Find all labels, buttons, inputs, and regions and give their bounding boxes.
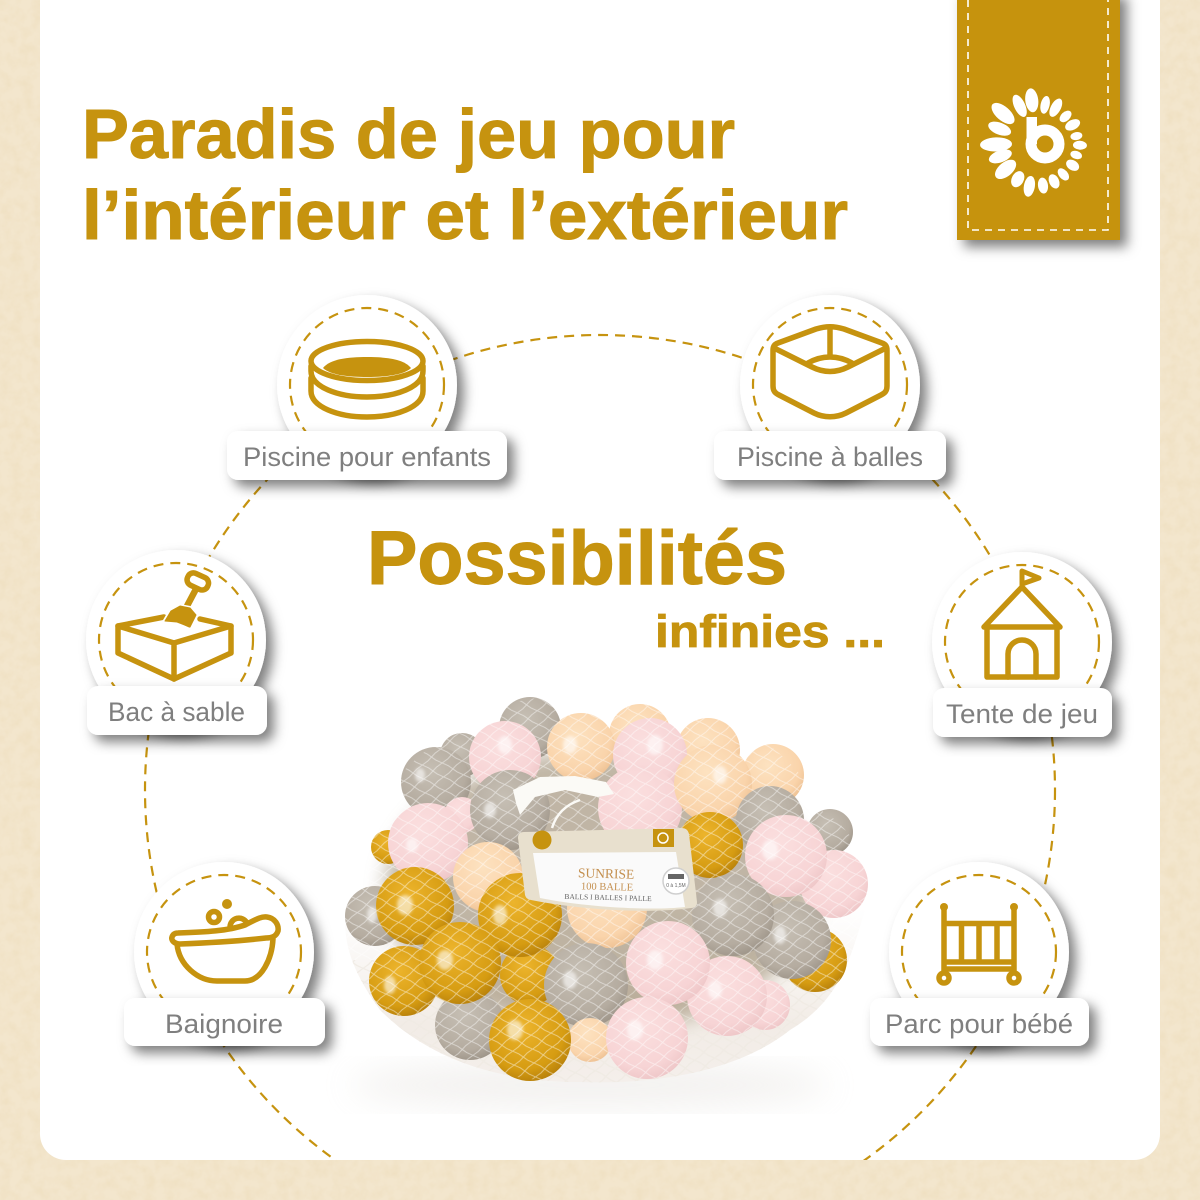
use: bac à sable bbox=[86, 550, 267, 735]
icon: brand sunflower logo bbox=[980, 88, 1087, 198]
label: piscine à balles bbox=[714, 431, 946, 480]
product label tag: SUNRISE bbox=[578, 865, 634, 882]
product label tag bbox=[518, 828, 697, 911]
product photo: bag of balls in net bbox=[340, 695, 875, 1109]
label: piscine à balles: Piscine à balles bbox=[737, 442, 923, 472]
label: parc pour bébé: Parc pour bébé bbox=[885, 1009, 1073, 1039]
label: bac à sable bbox=[87, 686, 267, 735]
icon: baby cot bbox=[939, 903, 1019, 983]
brand tag bbox=[957, 0, 1120, 240]
use: baignoire bbox=[124, 862, 325, 1046]
use: parc pour bébé bbox=[870, 862, 1089, 1046]
heading: possibilités infinies bbox=[367, 516, 885, 657]
product label tag: BALLS I BALLES I PALLE bbox=[564, 892, 652, 903]
icon: sandbox with shovel bbox=[118, 571, 231, 679]
use: piscine à balles bbox=[714, 295, 946, 480]
label: baignoire: Baignoire bbox=[165, 1009, 283, 1039]
label: tente de jeu bbox=[933, 688, 1112, 737]
net bbox=[340, 695, 875, 1087]
dashed ring connecting the uses bbox=[145, 335, 1055, 1200]
product label tag: 0 à 1,5M bbox=[666, 883, 686, 889]
label: parc pour bébé bbox=[870, 998, 1089, 1046]
icon: ball pit box bbox=[773, 327, 887, 417]
label: piscine pour enfants bbox=[227, 431, 507, 480]
title: l’intérieur et l’extérieur bbox=[82, 176, 848, 254]
heading: possibilités infinies: Possibilités bbox=[367, 516, 787, 601]
label: baignoire bbox=[124, 998, 325, 1046]
icon: paddling pool bbox=[311, 342, 423, 417]
icon: baby bath bbox=[172, 899, 278, 981]
use: tente de jeu bbox=[932, 552, 1112, 737]
title bbox=[82, 95, 848, 254]
product label tag: 100 BALLE bbox=[581, 881, 633, 894]
net tie: white rope bbox=[513, 776, 614, 828]
label: bac à sable: Bac à sable bbox=[108, 697, 245, 727]
label: piscine pour enfants: Piscine pour enfants bbox=[243, 442, 491, 472]
use: piscine pour enfants bbox=[227, 295, 507, 480]
heading: possibilités infinies: infinies ... bbox=[655, 606, 885, 657]
icon: play tent bbox=[984, 571, 1060, 677]
label: tente de jeu: Tente de jeu bbox=[946, 699, 1098, 729]
title: Paradis de jeu pour bbox=[82, 95, 735, 173]
